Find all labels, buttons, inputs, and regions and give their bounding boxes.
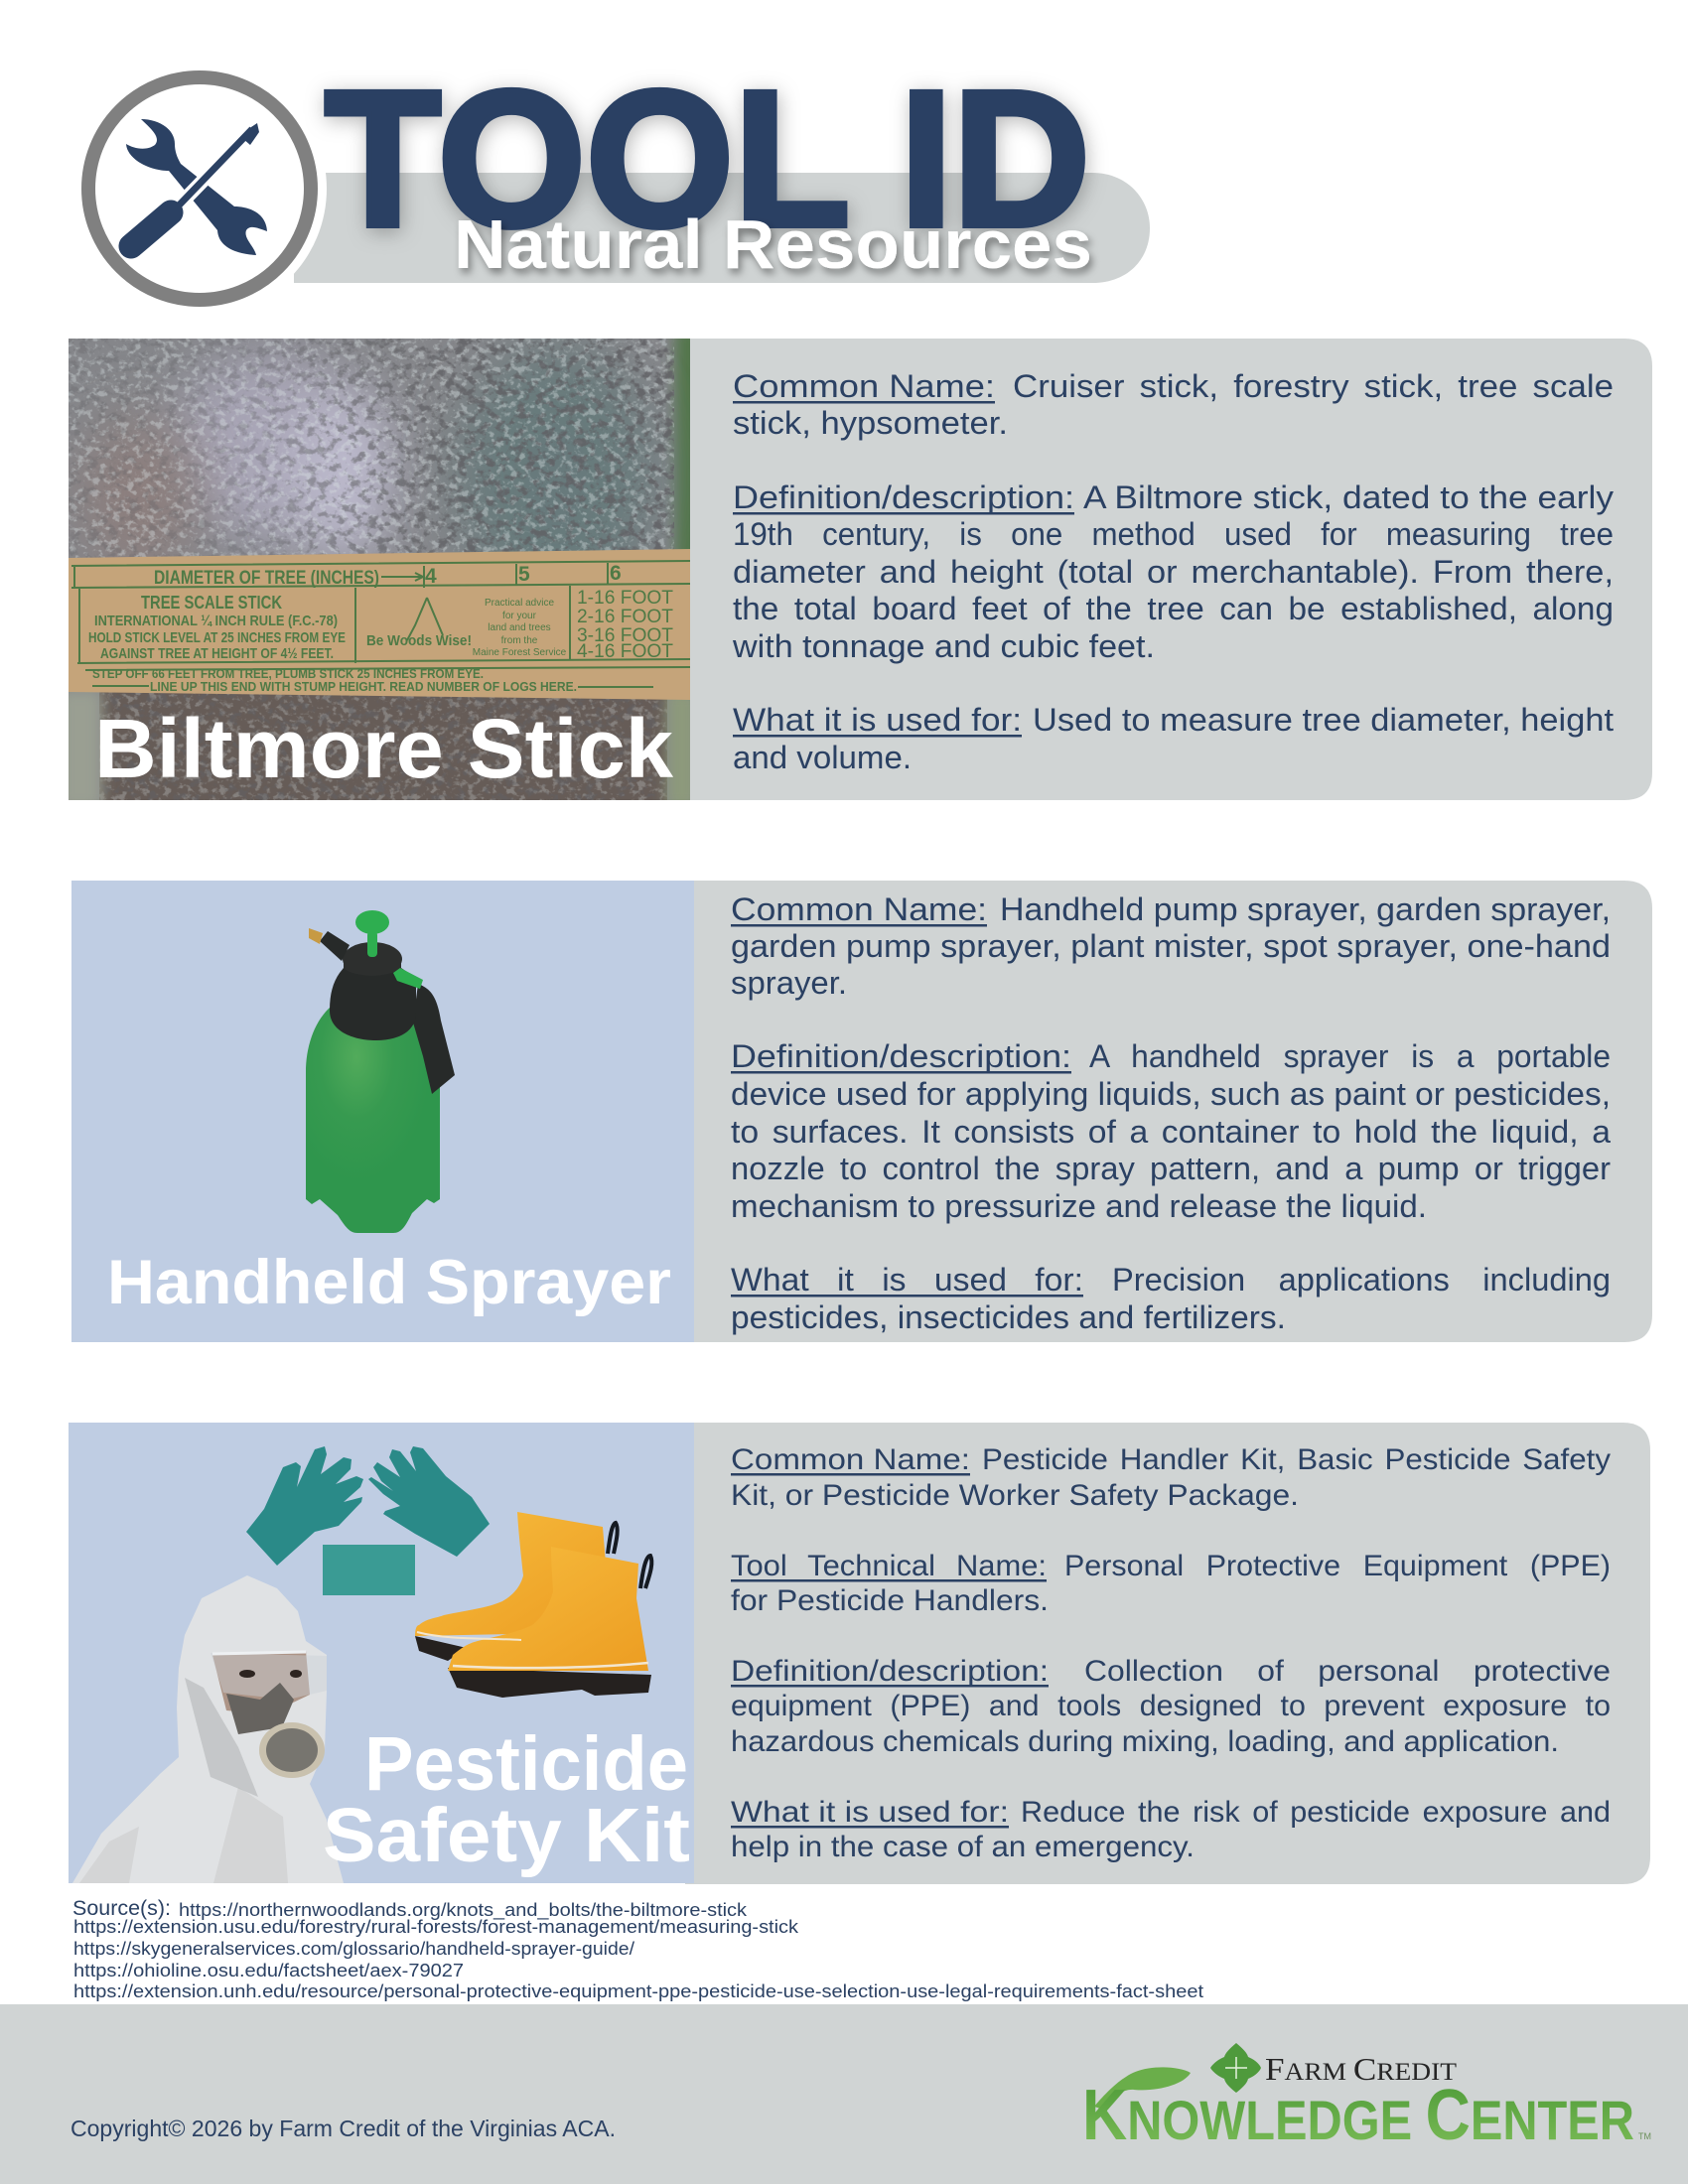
text block: Pesticide kit details: Collection of personal protective: [1084, 1655, 1611, 1688]
photo: Biltmore stick on tree: [60, 328, 705, 809]
stick: INTERNATIONAL ¼ INCH RULE (F.C.-78): [94, 613, 338, 629]
text block: Biltmore details: [732, 368, 1614, 775]
text block: Biltmore details: Cruiser stick, forestry stick, tree scale: [1013, 368, 1614, 404]
text block: Biltmore details: Definition/description:: [733, 479, 1074, 515]
icon: green leaf: [1094, 2067, 1191, 2109]
text block: Pesticide kit details: for Pesticide Handlers.: [731, 1584, 1049, 1617]
text block: Pesticide kit details: Reduce the risk of pesticide exposure and: [1021, 1796, 1611, 1829]
text block: Pesticide kit details: hazardous chemicals during mixing, loading, and application.: [731, 1725, 1559, 1758]
panel: Biltmore Stick: [60, 328, 1652, 809]
text block: Biltmore details: 19th century, is one method used for measuring tree: [733, 516, 1614, 552]
text block: Sprayer details: Precision applications including: [1112, 1262, 1611, 1297]
text block: Pesticide kit details: What it is used for:: [731, 1796, 1009, 1829]
logo: Farm Credit Knowledge Center: FARM CREDIT: [1265, 2051, 1457, 2087]
heading: TOOL ID: TOOL ID: [325, 51, 1090, 267]
header: Tool ID Natural Resources: [72, 51, 1150, 316]
text block: Sprayer details: device used for applying liquids, such as paint or pesticides,: [731, 1076, 1611, 1112]
text block: Pesticide kit details: Definition/description:: [731, 1655, 1049, 1688]
logo: Farm Credit Knowledge Center: KNOWLEDGE CENTER: [1082, 2076, 1634, 2155]
stick: 1-16 FOOT: [577, 588, 673, 609]
photo: person in protective suit with respirator: [72, 1575, 344, 1883]
text block: Pesticide kit details: Tool Technical Name:: [731, 1550, 1047, 1582]
text block: Sprayer details: pesticides, insecticides and fertilizers.: [731, 1299, 1286, 1335]
stick: Maine Forest Service: [473, 647, 567, 658]
text block: Pesticide kit details: help in the case of an emergency.: [731, 1831, 1195, 1863]
text block: Pesticide kit details: Personal Protective Equipment (PPE): [1064, 1550, 1611, 1582]
text block: Pesticide kit details: Common Name:: [731, 1443, 970, 1476]
text block: Biltmore details: What it is used for:: [733, 702, 1022, 738]
sources list: https://extension.unh.edu/resource/personal-protective-equipment-ppe-pesticide-use-selection-use-legal-requirements-fact-sheet: [73, 1981, 1203, 2001]
icon: green pump sprayer: [306, 910, 455, 1233]
text block: Biltmore details: and volume.: [733, 740, 912, 775]
text block: Sprayer details: [731, 891, 1611, 1335]
text block: Sprayer details: What it is used for:: [731, 1262, 1083, 1297]
text block: Sprayer details: A handheld sprayer is a portable: [1089, 1038, 1611, 1074]
heading: Biltmore Stick: Biltmore Stick: [94, 702, 673, 795]
text block: Pesticide kit details: [731, 1443, 1611, 1863]
logo: Farm Credit Knowledge Center: TM: [1638, 2131, 1651, 2141]
icon: Farm Credit diamond leaf: [1210, 2043, 1261, 2093]
footer bar: [0, 2004, 1688, 2184]
text panel background: [685, 881, 1652, 1342]
heading: Pesticide Safety Kit: [323, 1721, 690, 1878]
stick: 4-16 FOOT: [577, 641, 673, 662]
text panel background: [685, 1423, 1650, 1884]
stick: Practical advice: [485, 598, 554, 609]
copyright: Copyright© 2026 by Farm Credit of the Virginias ACA.: [70, 2116, 616, 2141]
text panel background: [685, 339, 1652, 800]
stick: 4: [425, 565, 437, 588]
image background: [69, 1423, 694, 1883]
icon: face mask: [323, 1545, 415, 1595]
stick: STEP OFF 66 FEET FROM TREE, PLUMB STICK 25 INCHES FROM EYE.: [92, 666, 484, 681]
stick: [69, 549, 690, 700]
text block: Sprayer details: garden pump sprayer, plant mister, spot sprayer, one-hand: [731, 928, 1611, 964]
stick: 2-16 FOOT: [577, 607, 673, 627]
stick: Be Woods Wise!: [366, 632, 472, 649]
stick: 6: [610, 562, 622, 585]
sources list: https://skygeneralservices.com/glossario/handheld-sprayer-guide/: [73, 1939, 634, 1959]
text block: Biltmore details: the total board feet of the tree can be established, along: [733, 591, 1614, 626]
heading: Handheld Sprayer: Handheld Sprayer: [107, 1248, 671, 1317]
sources list: https://northernwoodlands.org/knots_and_bolts/the-biltmore-stick: [179, 1900, 748, 1921]
text block: Pesticide kit details: Pesticide Handler Kit, Basic Pesticide Safety: [982, 1443, 1611, 1476]
sources list: [72, 1897, 1203, 2001]
stick: 3-16 FOOT: [577, 625, 673, 646]
text block: Pesticide kit details: Kit, or Pesticide Worker Safety Package.: [731, 1479, 1299, 1512]
text block: Sprayer details: Handheld pump sprayer, garden sprayer,: [1000, 891, 1611, 927]
image background: [71, 881, 694, 1342]
heading: Pesticide Safety Kit: Pesticide: [364, 1721, 688, 1807]
text block: Biltmore details: A Biltmore stick, dated to the early: [1083, 479, 1614, 515]
stick: for your: [502, 611, 537, 621]
text block: Sprayer details: sprayer.: [731, 965, 847, 1001]
text block: Sprayer details: Definition/description:: [731, 1038, 1071, 1074]
panel: Pesticide Safety Kit: [69, 1423, 1650, 1884]
icon: wrench and screwdriver in ring: [72, 62, 327, 316]
stick: HOLD STICK LEVEL AT 25 INCHES FROM EYE: [88, 629, 346, 646]
sources list: https://ohioline.osu.edu/factsheet/aex-79027: [73, 1961, 464, 1980]
stick: AGAINST TREE AT HEIGHT OF 4½ FEET.: [100, 645, 334, 662]
icon: rubber boots: [415, 1512, 651, 1698]
stick: LINE UP THIS END WITH STUMP HEIGHT. READ NUMBER OF LOGS HERE.: [150, 679, 577, 694]
text block: Biltmore details: Common Name:: [733, 368, 995, 404]
subheading: Natural Resources: Natural Resources: [454, 205, 1092, 283]
text block: Biltmore details: diameter and height (total or merchantable). From there,: [733, 554, 1614, 590]
stick: TREE SCALE STICK: [141, 593, 282, 613]
text block: Pesticide kit details: equipment (PPE) and tools designed to prevent exposure to: [731, 1690, 1611, 1722]
text block: Sprayer details: Common Name:: [731, 891, 987, 927]
stick: DIAMETER OF TREE (INCHES): [154, 568, 379, 589]
sources list: Source(s):: [72, 1897, 171, 1920]
panel: Handheld Sprayer: [71, 881, 1652, 1342]
stick: land and trees: [488, 622, 551, 633]
text block: Biltmore details: Used to measure tree diameter, height: [1033, 702, 1614, 738]
text block: Biltmore details: stick, hypsometer.: [733, 405, 1008, 441]
stick: 5: [518, 563, 530, 586]
text block: Biltmore details: with tonnage and cubic feet.: [732, 628, 1155, 664]
icon: gloves: [246, 1446, 490, 1566]
title pill background: [294, 173, 1150, 283]
stick: from the: [501, 635, 538, 646]
text block: Sprayer details: to surfaces. It consists of a container to hold the liquid, a: [731, 1114, 1611, 1150]
text block: Sprayer details: mechanism to pressurize and release the liquid.: [731, 1188, 1427, 1224]
heading: Pesticide Safety Kit: Safety Kit: [323, 1793, 690, 1878]
sources list: https://extension.usu.edu/forestry/rural-forests/forest-management/measuring-stick: [73, 1917, 799, 1937]
text block: Sprayer details: nozzle to control the spray pattern, and a pump or trigger: [731, 1151, 1611, 1186]
